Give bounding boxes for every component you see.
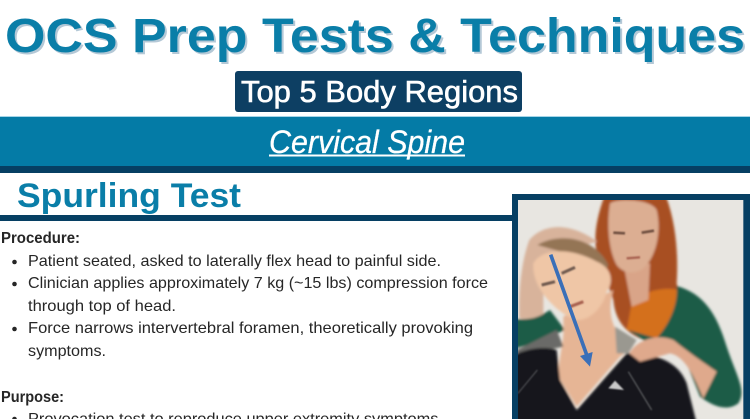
title: OCS Prep Tests & Techniques xyxy=(7,12,747,65)
purpose text block: Purpose: xyxy=(1,389,64,406)
clinician hand and forearm xyxy=(629,337,717,398)
patient collar xyxy=(510,330,563,353)
procedure text block: Force narrows intervertebral foramen, theoretically provoking xyxy=(28,320,473,337)
clinician hair xyxy=(595,190,679,338)
procedure text block: symptoms. xyxy=(28,343,106,360)
section banner: cervical spine xyxy=(0,116,750,173)
clinician face xyxy=(608,200,659,272)
procedure text block xyxy=(1,230,488,360)
procedure text block: Procedure: xyxy=(1,230,80,247)
test heading: Spurling Test xyxy=(17,177,241,215)
patient arm and hand xyxy=(510,227,597,320)
clinician sweater xyxy=(628,286,741,408)
patient neck xyxy=(558,290,626,407)
clinician neck xyxy=(623,263,650,307)
purpose text block xyxy=(1,389,443,419)
photo: clinician performing Spurling test on patient xyxy=(512,194,750,419)
arrow: compression force direction xyxy=(551,255,593,367)
patient jacket xyxy=(510,348,698,419)
title: OCS Prep Tests & Techniques xyxy=(5,10,745,63)
subtitle badge: Top 5 Body Regions xyxy=(241,74,518,109)
facial features xyxy=(542,282,555,285)
procedure text block: Clinician applies approximately 7 kg (~15 lbs) compression force xyxy=(28,275,488,292)
patient hair xyxy=(538,237,610,268)
procedure text block: through top of head. xyxy=(28,298,176,315)
test heading xyxy=(0,177,514,221)
section banner: cervical spine: Cervical Spine xyxy=(269,124,465,160)
patient face xyxy=(533,251,611,320)
procedure text block: Patient seated, asked to laterally flex head to painful side. xyxy=(28,253,441,270)
